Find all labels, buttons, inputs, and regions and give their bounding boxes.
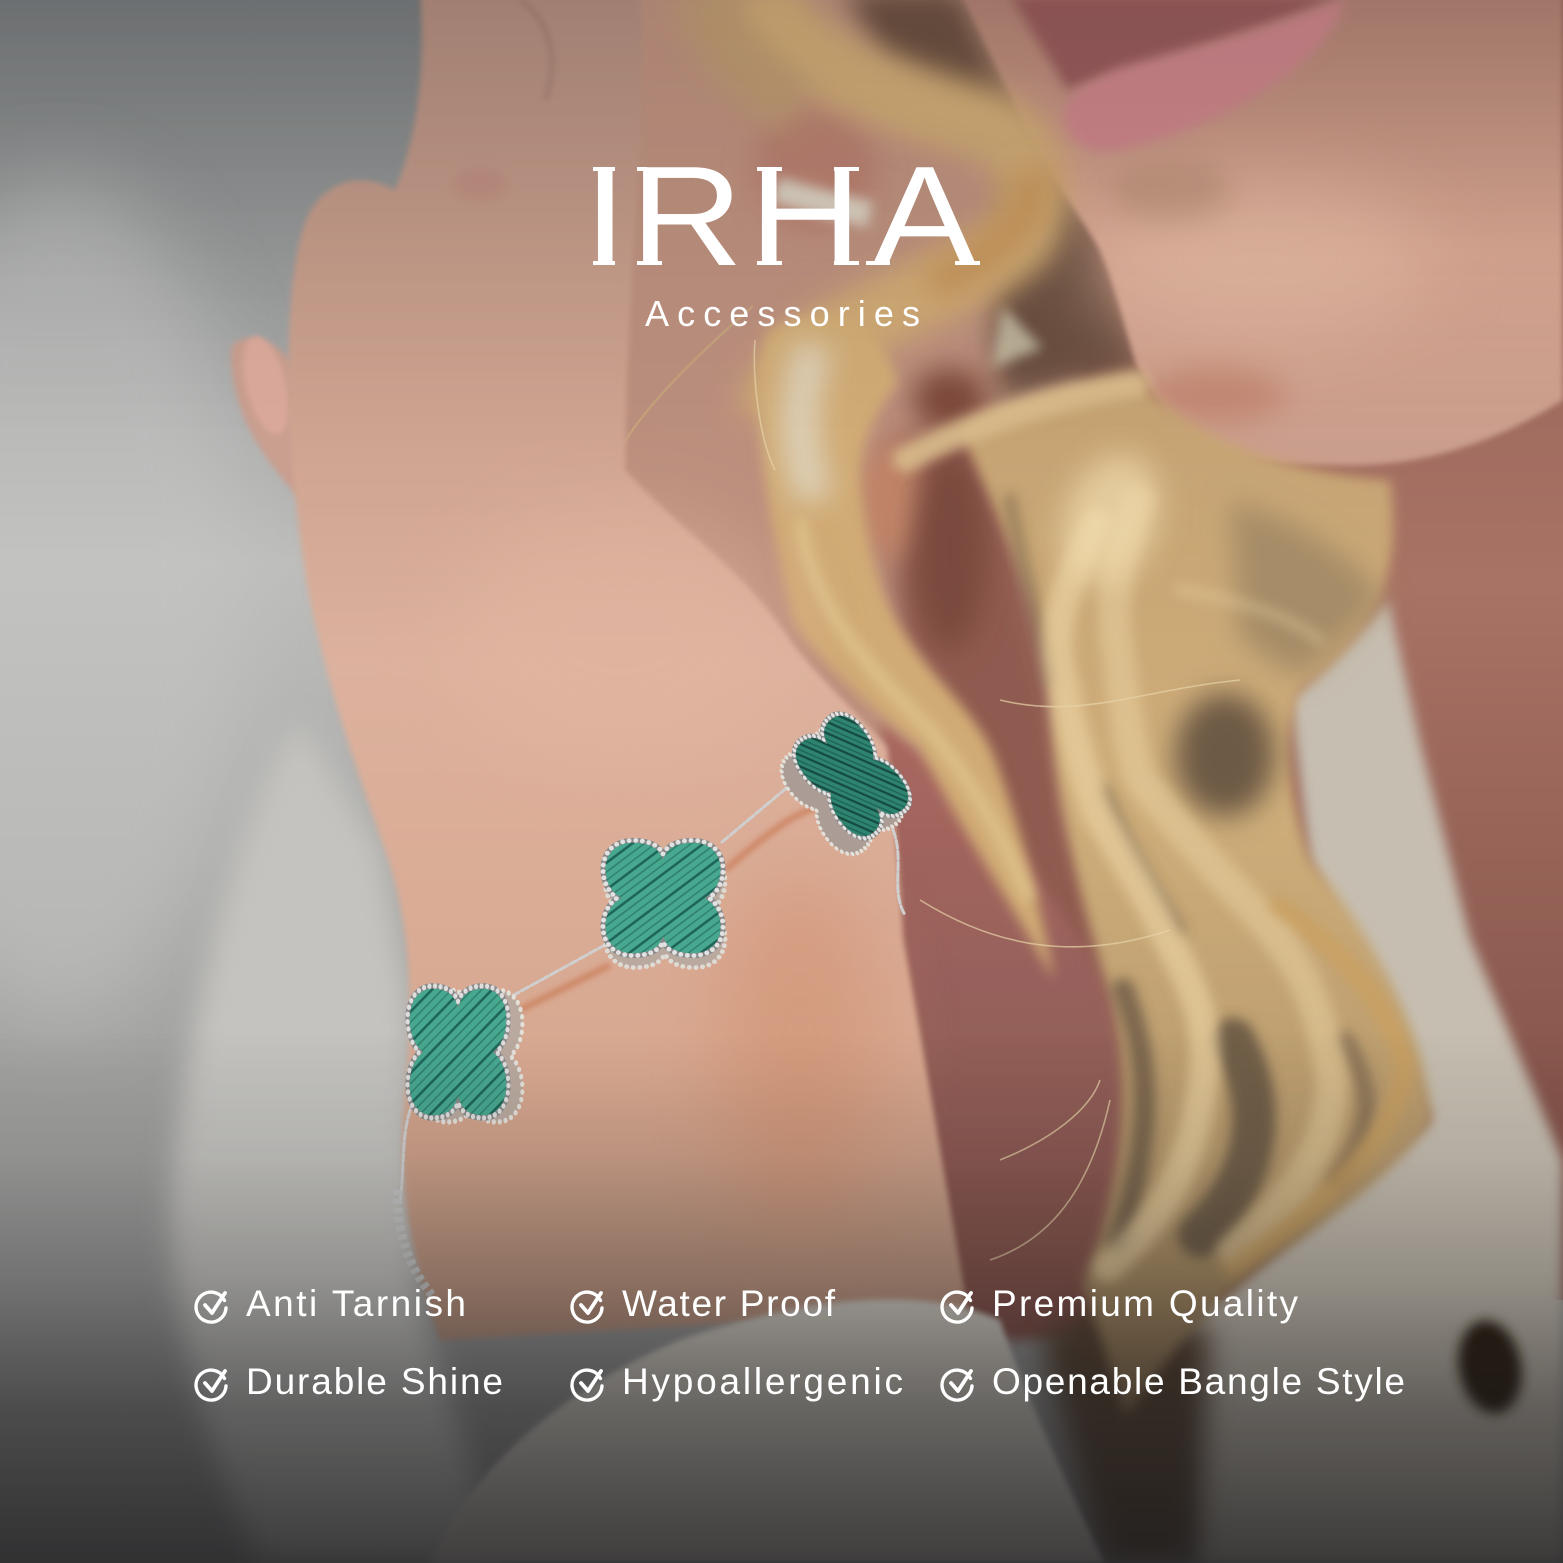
shirt button: [1451, 1315, 1529, 1419]
chain links: [400, 775, 905, 1200]
upper blond band: [760, 0, 1032, 420]
fine flyaway strands: [611, 306, 1240, 1260]
bright strands: [906, 383, 1404, 1267]
feature: openable bangle style: Openable Bangle Style: [992, 1361, 1405, 1402]
feature: premium quality: Premium Quality: [992, 1283, 1298, 1324]
left tapered lock: [758, 316, 1054, 980]
feature: anti tarnish: Anti Tarnish: [246, 1283, 466, 1324]
dark lower wedge of hair: [1040, 1300, 1210, 1563]
shadow gap between wrist and hair: [880, 720, 1124, 1340]
hand and wrist: [288, 0, 968, 1340]
feature: water proof: Water Proof: [622, 1283, 836, 1324]
dark strands: [1010, 500, 1366, 1244]
hair hollow: [1175, 693, 1275, 817]
hair: [608, 0, 1432, 1563]
clover right: [772, 705, 919, 863]
tan wisps over the collar: [1230, 500, 1385, 680]
main hair mass: [960, 380, 1432, 1417]
feature list: [196, 1283, 1405, 1402]
chin: [960, 0, 1563, 466]
clover centre: [603, 840, 725, 968]
neck: [1000, 0, 1563, 1300]
shadow under the jaw: [845, 0, 1140, 400]
title: IRHA: [584, 137, 977, 295]
skin behind the hair: [600, 0, 1140, 1000]
left shirt sleeve: [170, 720, 500, 1563]
feature: durable shine: Durable Shine: [246, 1361, 503, 1402]
fingertip and nail: [231, 332, 320, 520]
lips: [1010, 0, 1345, 151]
shirt collar: [1180, 600, 1563, 1563]
subtitle: Accessories: [645, 293, 920, 334]
feature: hypoallergenic: Hypoallergenic: [622, 1361, 903, 1402]
lower clasp: [398, 1190, 432, 1295]
dark red hollow between locks: [890, 430, 1100, 960]
bracelet: [398, 705, 919, 1295]
bracelet skin crease: [520, 808, 815, 1010]
clover left: [408, 986, 522, 1122]
shirt cuff: [430, 1300, 1104, 1563]
